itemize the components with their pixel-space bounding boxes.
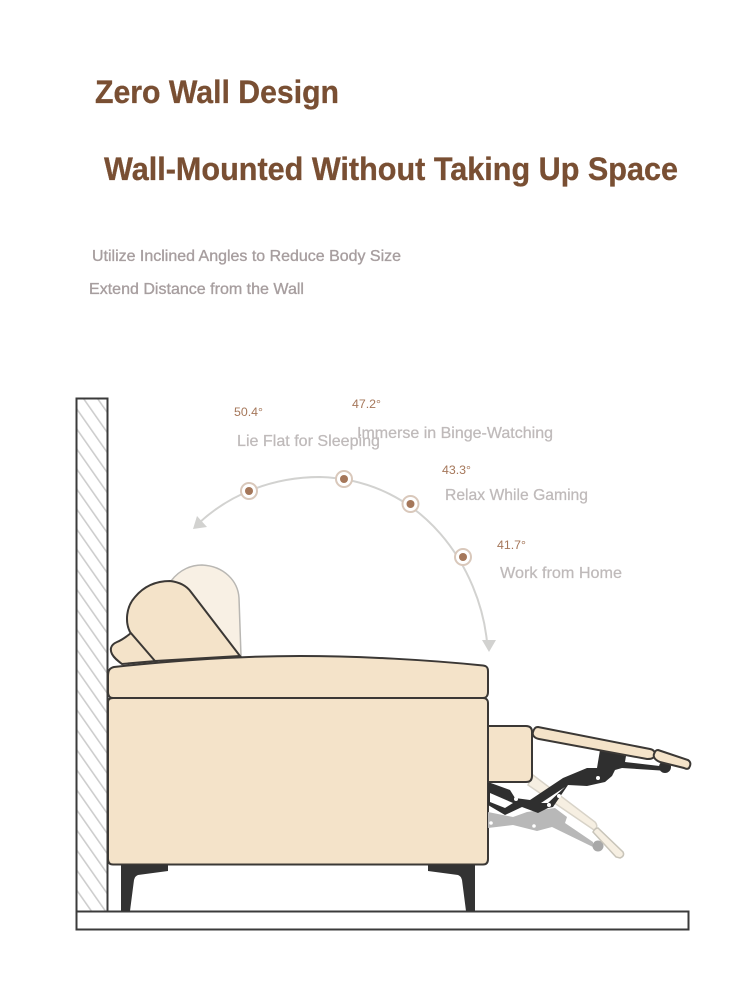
footrest mechanism xyxy=(488,750,671,815)
angle: 47.2: 47.2° xyxy=(352,397,381,411)
wall xyxy=(76,398,108,912)
ghost mechanism xyxy=(488,808,604,852)
label: Immerse in Binge-Watching: Immerse in Binge-Watching xyxy=(357,425,553,442)
marker: 43.3 degrees xyxy=(402,496,418,512)
right sofa leg xyxy=(428,865,475,911)
marker: 50.4 degrees xyxy=(241,483,257,499)
ghost footrest pads xyxy=(528,775,624,858)
left sofa leg xyxy=(121,865,168,911)
seat cushion xyxy=(108,656,488,698)
angle: 41.7: 41.7° xyxy=(497,538,526,552)
label: Work from Home: Work from Home xyxy=(500,565,622,582)
rear headrest xyxy=(111,633,156,664)
subtitle: inclined angles: Utilize Inclined Angles to Reduce Body Size xyxy=(92,248,401,265)
footrest box xyxy=(488,726,532,782)
reclined backrest ghost xyxy=(171,565,241,660)
upright backrest xyxy=(127,581,240,661)
label: Lie Flat for Sleeping: Lie Flat for Sleeping xyxy=(237,433,380,450)
sofa base xyxy=(108,698,488,864)
label: Relax While Gaming: Relax While Gaming xyxy=(445,487,588,504)
angle: 43.3: 43.3° xyxy=(442,463,471,477)
floor xyxy=(76,912,688,930)
angle: 50.4: 50.4° xyxy=(234,405,263,419)
subtitle: extend distance: Extend Distance from the Wall xyxy=(89,281,304,298)
marker: 41.7 degrees xyxy=(455,549,471,565)
title: Zero Wall Design: Zero Wall Design xyxy=(95,74,339,110)
title: Wall-Mounted Without Taking Up Space: Wall-Mounted Without Taking Up Space xyxy=(104,151,678,187)
footrest upper pad xyxy=(533,727,655,759)
footrest tip pad xyxy=(654,750,690,769)
marker: 47.2 degrees xyxy=(336,471,352,487)
recline arc with arrows xyxy=(193,477,496,652)
